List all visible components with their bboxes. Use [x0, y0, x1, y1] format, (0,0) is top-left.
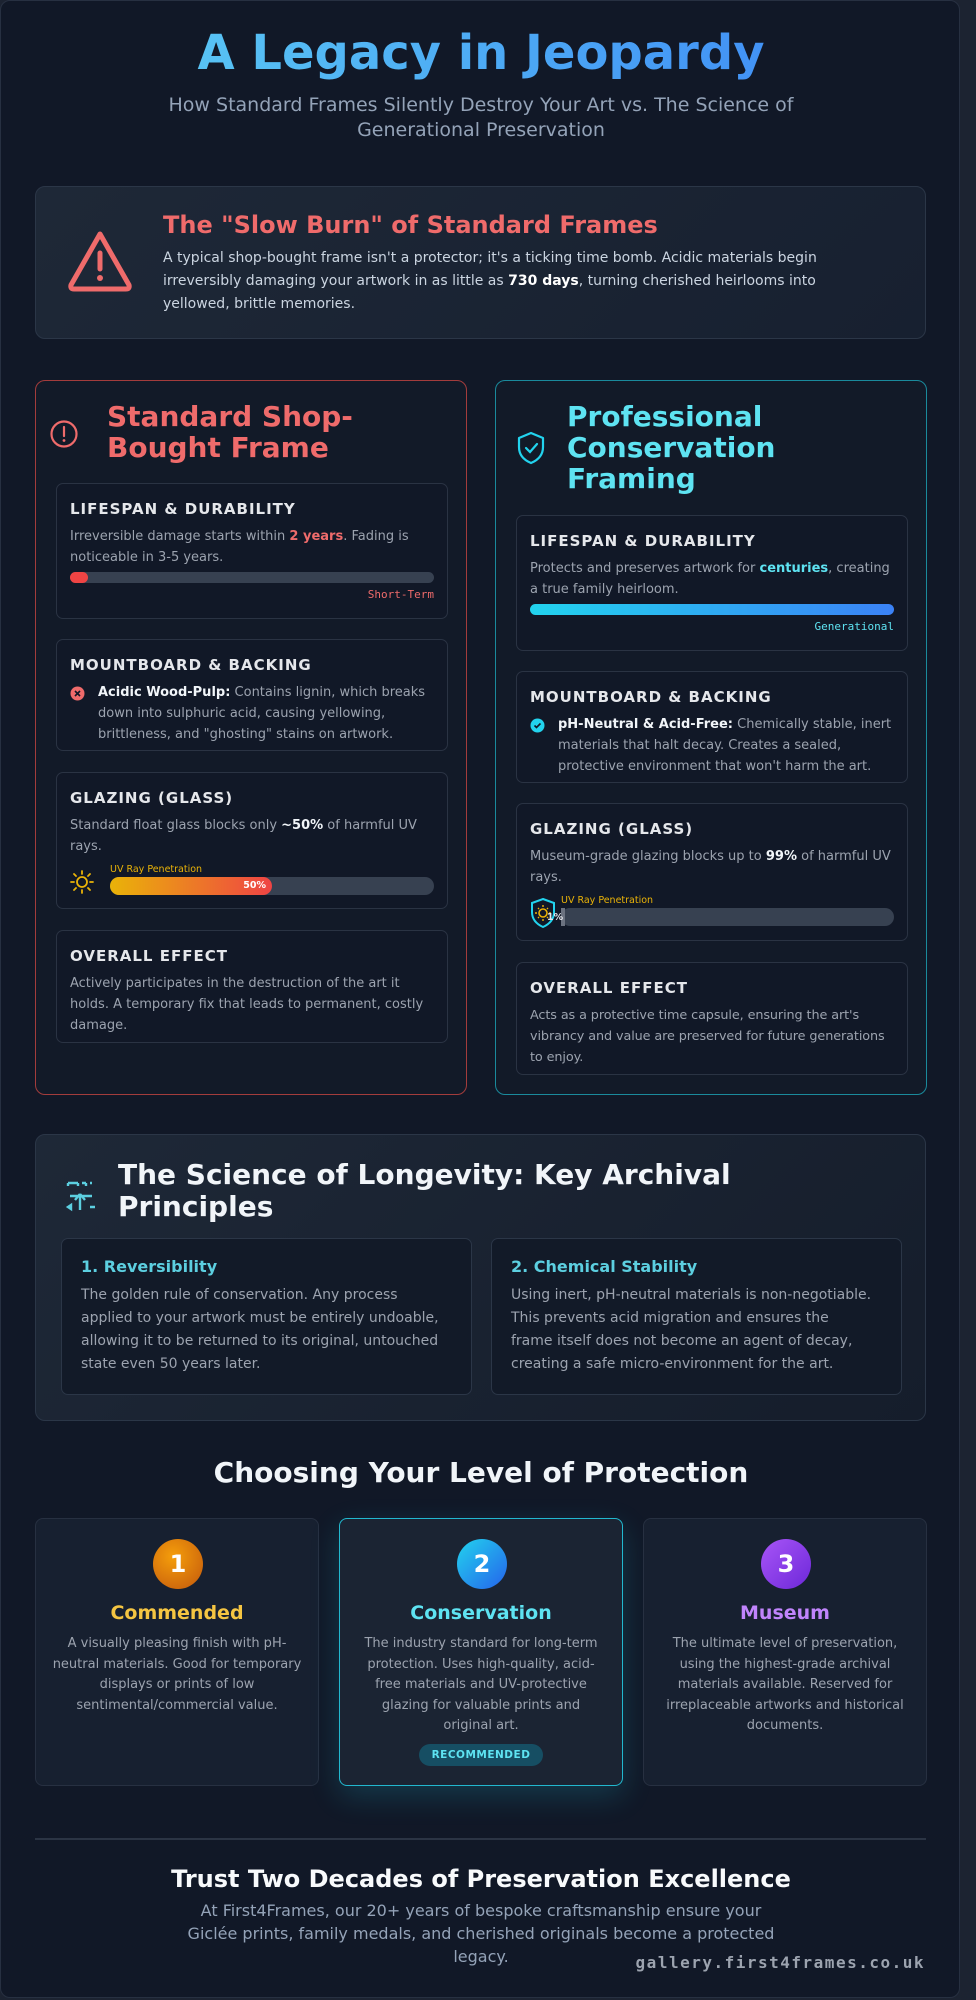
card: lifespan: Short-Term — [368, 588, 434, 601]
heading: science — [118, 1158, 731, 1223]
bar: short-term — [70, 572, 434, 583]
alert text: A typical shop-bought frame isn't a protector; it's a ticking time bomb. Acidic materials begin irreversibly damaging your artwork in as little as 730 days, turning cherished heirlooms into yellowed, brittle memories. — [163, 250, 817, 312]
tier: museum: 3 — [778, 1550, 794, 1578]
footer text: At First4Frames, our 20+ years of bespoke craftsmanship ensure your Giclée prints, family medals, and cherished originals become a protected legacy. — [188, 1901, 774, 1966]
heading: science: Principles — [118, 1190, 273, 1223]
card: chemical stability: Using inert, pH-neutral materials is non-negotiable. This prevents acid migration and ensures the frame itself does not become an agent of decay, creating a safe micro-environment for the art. — [511, 1287, 871, 1372]
panel: slow burn alert — [35, 186, 926, 339]
bar: uv 1% — [561, 908, 894, 926]
tier: conservation — [339, 1518, 623, 1786]
tier: museum — [643, 1518, 927, 1786]
icon: exclamation circle — [50, 420, 78, 448]
icon: shield check — [518, 432, 544, 464]
card: lifespan: LIFESPAN & DURABILITY — [70, 500, 296, 518]
card: reversibility: 1. Reversibility — [81, 1257, 217, 1276]
heading: standard: Standard Shop- — [107, 400, 353, 433]
footer url: gallery.first4frames.co.uk — [636, 1953, 925, 1972]
card: overall effect: OVERALL EFFECT — [70, 947, 228, 965]
panel: professional framing — [495, 380, 927, 1095]
card: glazing: GLAZING (GLASS) — [70, 789, 233, 807]
card: overall effect: OVERALL EFFECT — [530, 979, 688, 997]
card: lifespan: Generational — [815, 620, 894, 633]
bar: uv 50% — [110, 877, 434, 895]
heading: standard: Bought Frame — [107, 431, 329, 464]
card: overall effect: Actively participates in the destruction of the art it holds. A temporary fix that leads to permanent, costly damage. — [70, 976, 423, 1033]
tier: commended: 1 — [170, 1550, 186, 1578]
heading: professional: Framing — [567, 462, 696, 495]
tier: commended — [35, 1518, 319, 1786]
icon: check mark — [530, 718, 544, 732]
title — [1, 25, 961, 81]
icon: balance — [66, 1182, 95, 1212]
tier: commended: A visually pleasing finish with pH-neutral materials. Good for temporary displays or prints of low sentimental/commercial value. — [53, 1636, 301, 1712]
heading: professional: Conservation — [567, 431, 775, 464]
heading: professional: Professional — [567, 400, 762, 433]
card: glazing: 1% — [547, 912, 563, 923]
card: overall effect: Acts as a protective time capsule, ensuring the art's vibrancy and value are preserved for future generations to enjoy. — [530, 1008, 885, 1065]
subtitle: How Standard Frames Silently Destroy Your Art vs. The Science of Generational Preservation — [169, 94, 793, 141]
tier: conservation: The industry standard for long-term protection. Uses high-quality, acid-free materials and UV-protective glazing for valuable prints and original art. — [364, 1636, 598, 1733]
card: reversibility: The golden rule of conservation. Any process applied to your artwork must be entirely undoable, allowing it to be returned to its original, untouched state even 50 years later. — [81, 1287, 439, 1372]
icon: sun — [70, 870, 94, 894]
card: lifespan: Protects and preserves artwork for centuries, creating a true family heirloom. — [530, 561, 890, 597]
card: chemical stability — [491, 1238, 902, 1395]
tier: museum: Museum — [740, 1602, 830, 1624]
icon: warning triangle — [68, 232, 132, 292]
card: chemical stability: 2. Chemical Stability — [511, 1257, 697, 1276]
card: mountboard: Acidic Wood-Pulp: Contains lignin, which breaks down into sulphuric acid, causing yellowing, brittleness, and "ghosting" stains on artwork. — [98, 685, 425, 742]
card: mountboard: pH-Neutral & Acid-Free: Chemically stable, inert materials that halt decay. Creates a sealed, protective environment that won't harm the art. — [558, 717, 891, 774]
tier: conservation: Conservation — [410, 1602, 552, 1624]
card: glazing: GLAZING (GLASS) — [530, 820, 693, 838]
card: glazing: Museum-grade glazing blocks up to 99% of harmful UV rays. — [530, 849, 891, 885]
heading: professional — [567, 400, 775, 495]
card: glazing: Standard float glass blocks only ~50% of harmful UV rays. — [70, 818, 417, 854]
card: glazing: UV Ray Penetration — [110, 864, 202, 875]
tier: conservation: 2 — [474, 1550, 490, 1578]
title: A Legacy in Jeopardy — [198, 25, 764, 81]
heading: science: The Science of Longevity: Key Archival — [118, 1158, 731, 1191]
card: lifespan — [56, 483, 448, 619]
panel: standard frame — [35, 380, 467, 1095]
tier: museum: The ultimate level of preservation, using the highest-grade archival materials available. Reserved for irreplaceable artworks and historical documents. — [666, 1636, 904, 1733]
card: lifespan — [516, 515, 908, 651]
heading: standard — [107, 400, 353, 464]
bar: generational — [530, 604, 894, 615]
card: mountboard: MOUNTBOARD & BACKING — [70, 656, 312, 674]
bar: uv 50%: 50% — [243, 880, 266, 891]
card: mountboard — [56, 639, 448, 751]
card: overall effect — [516, 962, 908, 1075]
card: glazing: UV Ray Penetration — [561, 895, 653, 906]
card: mountboard: MOUNTBOARD & BACKING — [530, 688, 772, 706]
badge: recommended — [419, 1744, 543, 1766]
card: glazing — [56, 772, 448, 909]
footer heading: Trust Two Decades of Preservation Excellence — [171, 1865, 791, 1893]
badge: recommended: RECOMMENDED — [432, 1749, 530, 1761]
heading: choosing level: Choosing Your Level of Protection — [214, 1456, 748, 1489]
card: glazing — [516, 803, 908, 941]
card: lifespan: LIFESPAN & DURABILITY — [530, 532, 756, 550]
card: reversibility — [61, 1238, 472, 1395]
card: overall effect — [56, 930, 448, 1043]
card: mountboard — [516, 671, 908, 783]
icon: x mark — [70, 686, 84, 700]
tier: commended: Commended — [110, 1602, 244, 1624]
card: lifespan: Irreversible damage starts within 2 years. Fading is noticeable in 3-5 years. — [70, 529, 409, 565]
icon: shield sun — [531, 898, 555, 928]
alert heading: The "Slow Burn" of Standard Frames — [163, 211, 658, 239]
panel: science of longevity — [35, 1134, 926, 1421]
